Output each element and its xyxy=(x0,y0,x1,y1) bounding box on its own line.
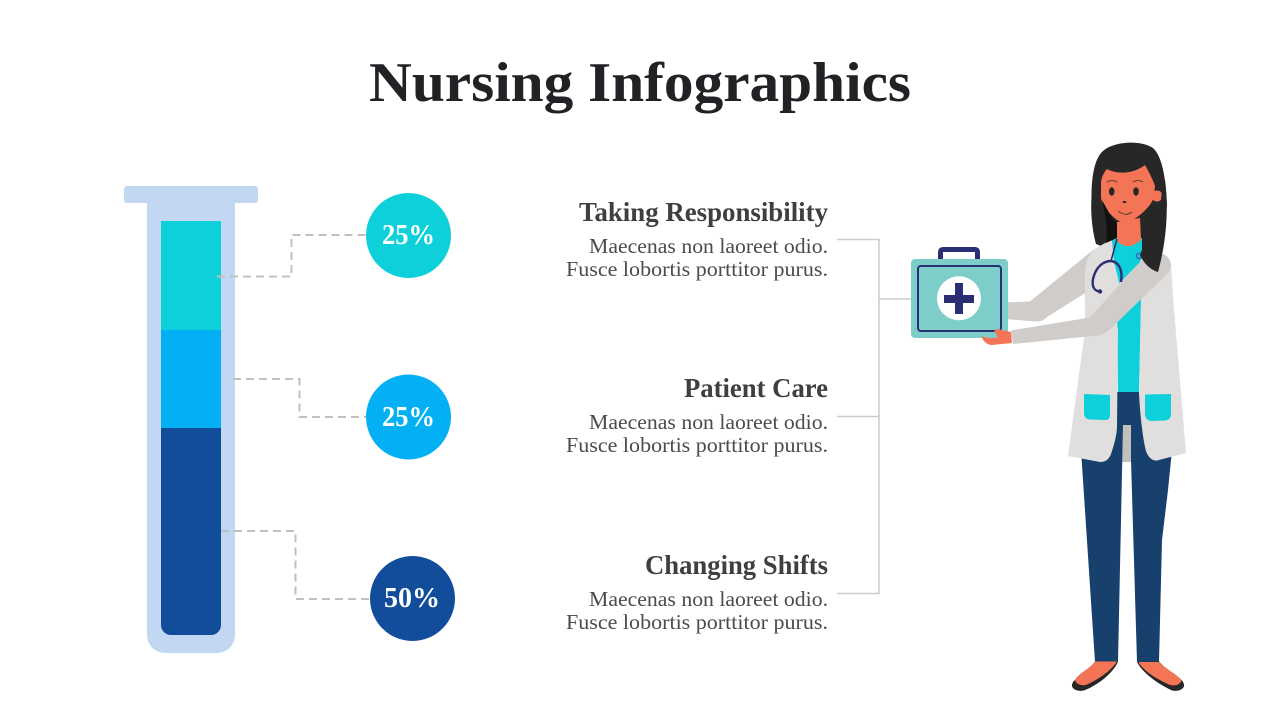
percent badge: 25% blue xyxy=(366,374,451,460)
text block: Taking Responsibility: Fusce lobortis porttitor purus. xyxy=(566,257,828,281)
test tube chart xyxy=(124,186,258,653)
text block: Taking Responsibility: Maecenas non laoreet odio. xyxy=(589,234,828,258)
hair back xyxy=(1091,143,1167,262)
text block: Taking Responsibility xyxy=(566,197,828,281)
back arm xyxy=(1005,250,1093,322)
nurse hand xyxy=(981,329,1012,345)
kit cross xyxy=(944,283,974,314)
trousers xyxy=(1081,392,1172,662)
dashed connector: blue xyxy=(233,379,366,417)
brows and smile xyxy=(1107,180,1143,214)
ear xyxy=(1152,190,1162,202)
eyes xyxy=(1109,187,1139,203)
right pocket xyxy=(1145,394,1171,421)
grey lining between legs xyxy=(1122,424,1131,462)
scrub top xyxy=(1112,238,1142,392)
title: Nursing Infographics xyxy=(369,52,911,114)
kit inner outline xyxy=(918,266,1001,331)
bracket connector to medical kit xyxy=(837,240,911,594)
text block: Patient Care: Patient Care xyxy=(684,373,828,403)
left pocket xyxy=(1084,394,1110,420)
right shoe xyxy=(1137,662,1184,691)
medical kit xyxy=(911,250,1008,338)
percent badge: 25% teal xyxy=(366,193,451,278)
kit handle xyxy=(940,250,978,259)
left shoe xyxy=(1072,662,1118,691)
percent badge: 50% navy xyxy=(370,556,455,641)
dashed connector: navy xyxy=(221,531,370,599)
stethoscope xyxy=(1093,239,1142,292)
hair front lock xyxy=(1140,178,1167,272)
neck xyxy=(1117,218,1141,246)
coat collar right xyxy=(1115,250,1152,298)
hair shadow xyxy=(1102,200,1117,243)
text block: Changing Shifts: Changing Shifts xyxy=(645,550,828,580)
kit case xyxy=(911,259,1008,338)
text block: Patient Care: Maecenas non laoreet odio. xyxy=(589,410,828,434)
percent badge: 50% navy: 50% xyxy=(384,583,440,614)
face xyxy=(1101,165,1155,222)
dashed connector: teal xyxy=(217,235,366,276)
percent badge: 25% teal: 25% xyxy=(382,220,435,251)
blue segment xyxy=(161,330,221,428)
tube rim xyxy=(124,186,258,203)
teal segment xyxy=(161,221,221,330)
navy segment xyxy=(161,428,221,635)
text block: Changing Shifts: Fusce lobortis porttitor purus. xyxy=(566,610,828,634)
kit white circle xyxy=(937,276,981,320)
text block: Patient Care: Fusce lobortis porttitor purus. xyxy=(566,433,828,457)
text block: Changing Shifts xyxy=(566,550,828,634)
coat right panel xyxy=(1139,262,1186,461)
nurse illustration xyxy=(1005,143,1186,691)
front arm xyxy=(1011,253,1171,344)
coat left panel xyxy=(1068,239,1120,462)
percent badge: 25% blue: 25% xyxy=(382,402,435,433)
text block: Changing Shifts: Maecenas non laoreet odio. xyxy=(589,587,828,611)
text block: Patient Care xyxy=(566,373,828,457)
text block: Taking Responsibility: Taking Responsibility xyxy=(579,197,828,227)
tube body xyxy=(147,203,235,653)
